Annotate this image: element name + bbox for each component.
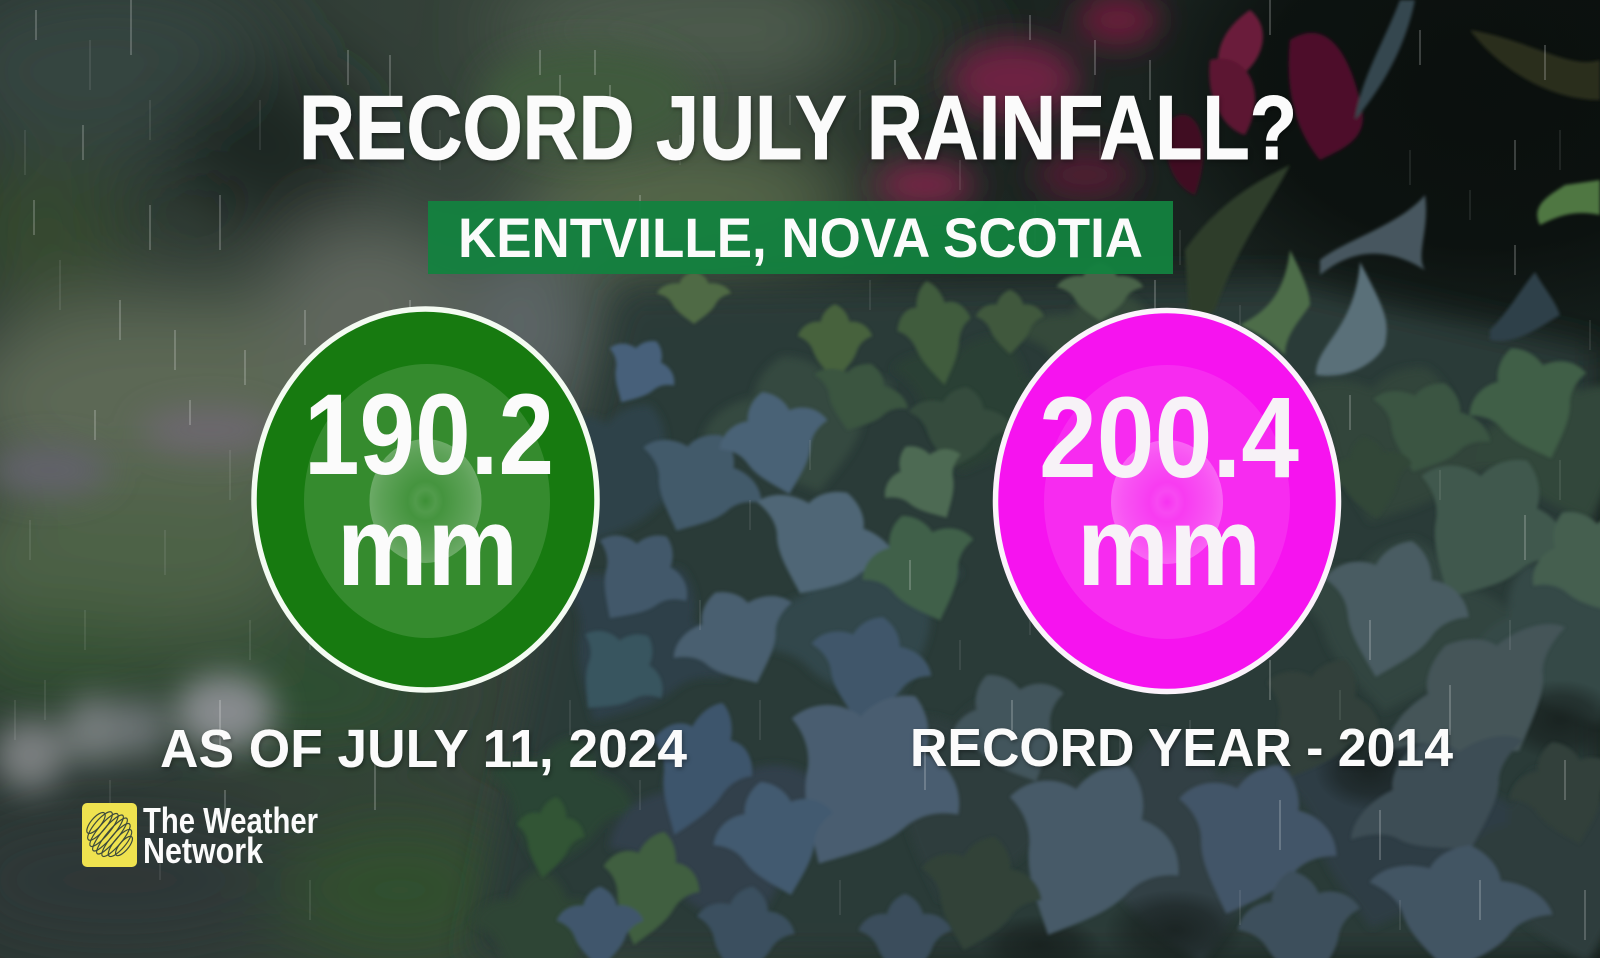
circle: current rainfall, green: 190.2 — [304, 371, 554, 499]
logo: The Weather Network: Network — [143, 830, 264, 871]
circle: record rainfall, magenta: 200.4 — [1039, 374, 1299, 502]
icon: yellow globe — [82, 803, 137, 867]
label: record year: RECORD YEAR - 2014 — [910, 718, 1453, 778]
logo: The Weather Network: The Weather — [143, 800, 318, 841]
foliage: shadow gaps — [980, 680, 1600, 958]
foliage: back layer — [469, 290, 1600, 958]
title: RECORD JULY RAINFALL? — [299, 78, 1297, 179]
circle: current rainfall, green — [254, 309, 597, 690]
location banner: KENTVILLE, NOVA SCOTIA — [458, 206, 1143, 269]
circle: record rainfall, magenta — [996, 310, 1338, 692]
circle: current rainfall, green: mm — [337, 484, 518, 609]
label: as of date: AS OF JULY 11, 2024 — [160, 719, 687, 779]
logo: The Weather Network — [82, 800, 318, 871]
circle: record rainfall, magenta: mm — [1077, 484, 1261, 609]
flowers and upper leaves — [1166, 0, 1600, 376]
foliage: front leaves — [509, 262, 1600, 958]
